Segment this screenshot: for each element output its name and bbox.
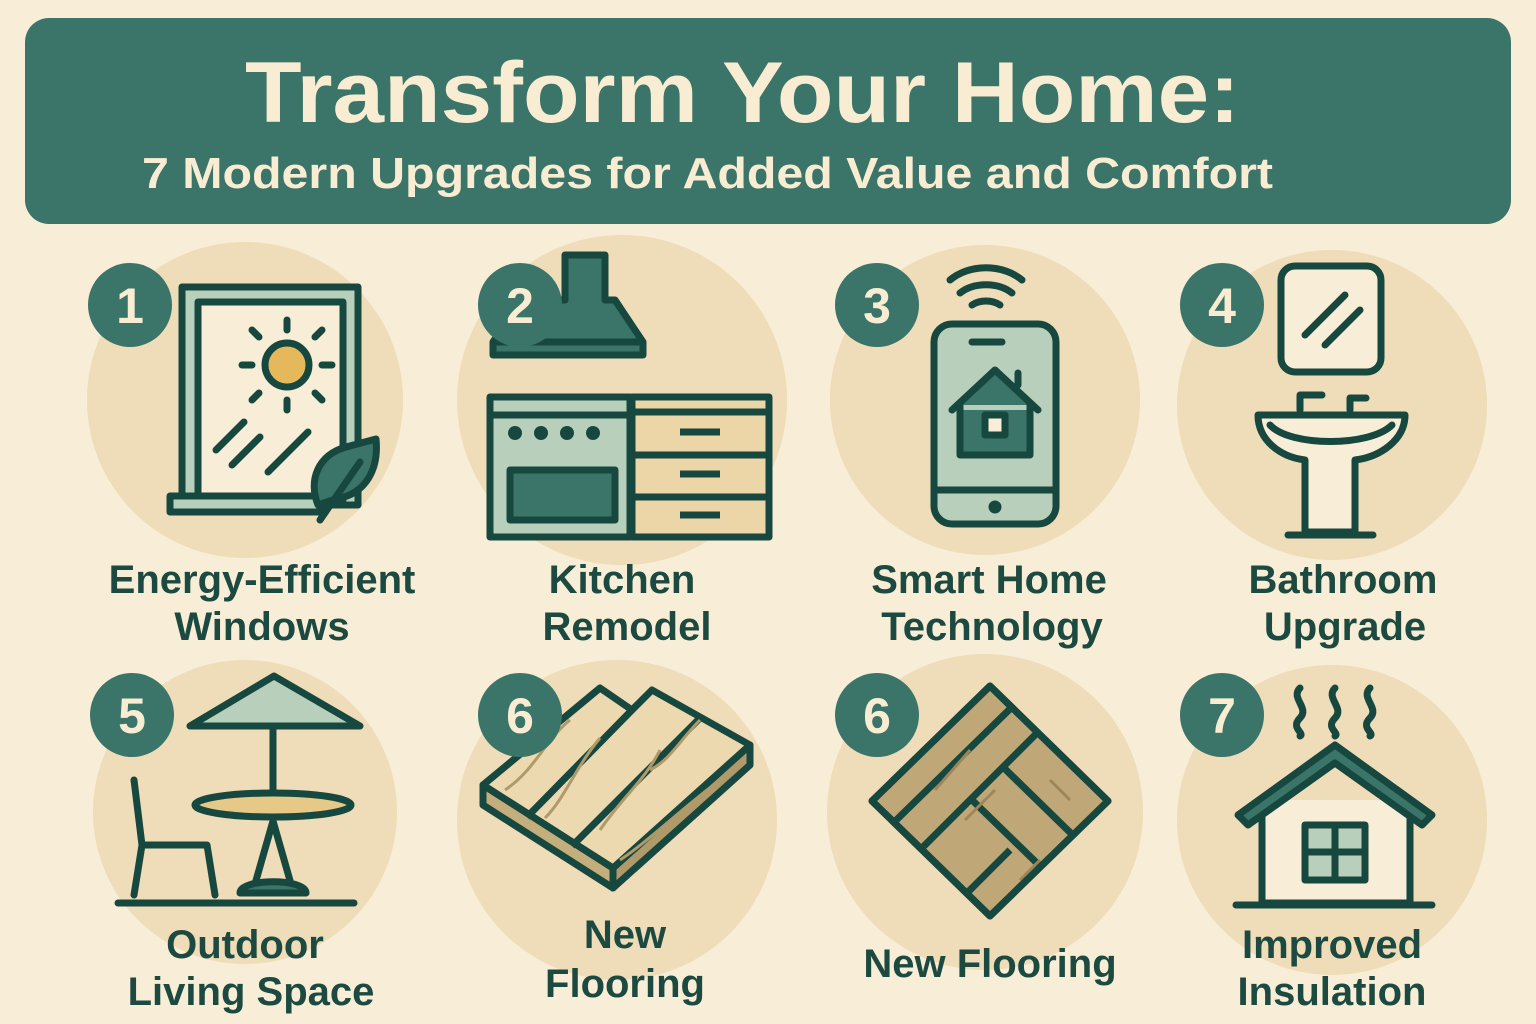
item 6b: parquet (835, 673, 1108, 916)
label 3: Technology (881, 605, 1103, 649)
background circles (87, 235, 1487, 980)
item 3: smart home (835, 263, 1056, 524)
item 5: outdoor (90, 673, 360, 903)
label 4: Bathroom (1249, 558, 1437, 602)
badge 5: 5 (118, 688, 146, 744)
label 4: Upgrade (1264, 605, 1426, 649)
icon: sink and mirror (1258, 266, 1405, 535)
label 5: Living Space (128, 970, 374, 1014)
icon: wood planks (483, 688, 750, 888)
badge 6b: 6 (863, 688, 891, 744)
title: Transform Your Home: (245, 45, 1240, 141)
badge 1 (88, 263, 172, 347)
badge 7: 7 (1208, 688, 1236, 744)
badge 4: 4 (1208, 278, 1236, 334)
item 6a: flooring boards (478, 673, 750, 888)
badge 3: 3 (863, 278, 891, 334)
badge 6a: 6 (506, 688, 534, 744)
item 4: bathroom (1180, 263, 1405, 535)
badge 2 (478, 263, 562, 347)
icon: insulated house (1236, 688, 1432, 905)
badge 3 (835, 263, 919, 347)
badge 6b (835, 673, 919, 757)
label 1: Windows (174, 605, 350, 649)
subtitle: 7 Modern Upgrades for Added Value and Comfort (142, 149, 1273, 198)
icon: phone (934, 268, 1056, 524)
badge 7 (1180, 673, 1264, 757)
badge 1: 1 (116, 278, 144, 334)
badge 6a (478, 673, 562, 757)
badge 2: 2 (506, 278, 534, 334)
badge 4 (1180, 263, 1264, 347)
icon: patio table (118, 676, 360, 903)
label 2: Kitchen (549, 558, 695, 602)
item 7: insulation (1180, 673, 1432, 905)
badge 5 (90, 673, 174, 757)
label 2: Remodel (543, 605, 711, 649)
label 7: Improved (1242, 923, 1422, 967)
label 7: Insulation (1238, 970, 1426, 1014)
label 5: Outdoor (166, 923, 324, 967)
label 1: Energy-Efficient (109, 558, 415, 602)
icon: window (170, 287, 376, 520)
label 6a: New (584, 913, 666, 957)
label 3: Smart Home (871, 558, 1107, 602)
label 6b: New Flooring (863, 942, 1117, 986)
item 1: energy-efficient windows (88, 263, 376, 520)
label 6a: Flooring (545, 962, 705, 1006)
icon: parquet diamond (872, 686, 1108, 916)
header banner (25, 18, 1511, 224)
item 2: kitchen (478, 255, 769, 537)
icon: kitchen (490, 255, 769, 537)
